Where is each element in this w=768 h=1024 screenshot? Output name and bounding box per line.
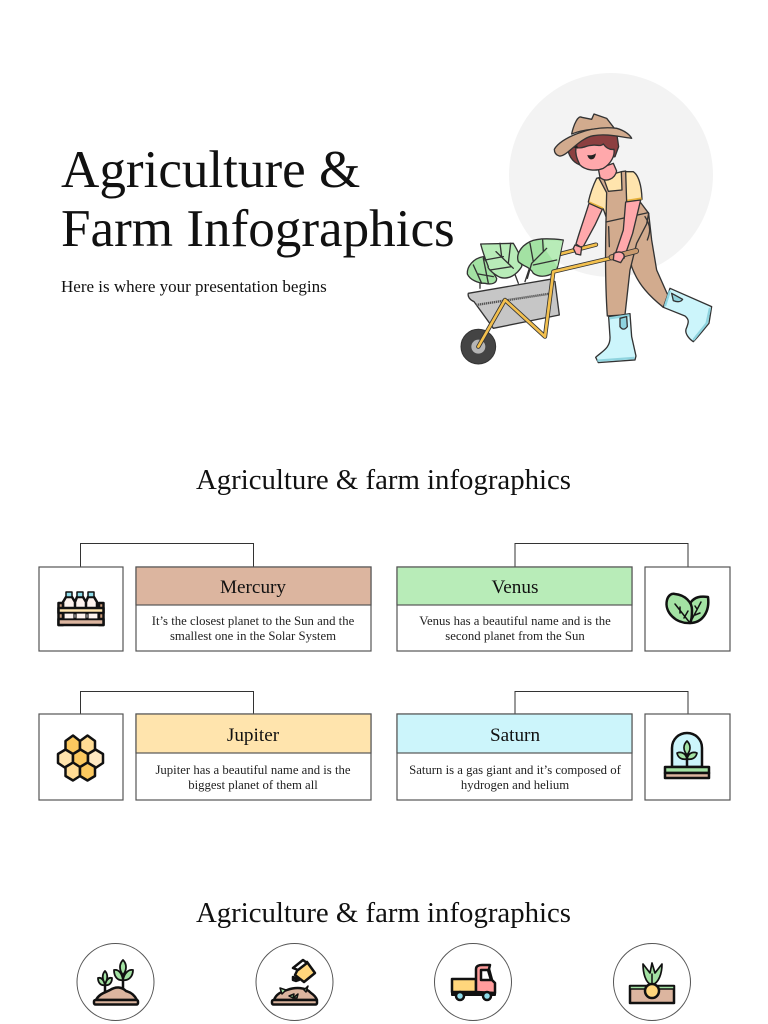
card: Jupiter: Jupiter <box>227 725 280 746</box>
illustration: farmer with wheelbarrow <box>461 73 713 364</box>
card: Saturn: hydrogen and helium <box>461 778 569 792</box>
card: Venus <box>397 544 730 651</box>
title: Agriculture & <box>61 141 360 199</box>
subtitle: Here is where your presentation begins <box>61 277 327 296</box>
icon: honeycomb <box>58 736 103 780</box>
card: Mercury: Mercury <box>220 577 286 598</box>
card: Mercury: It’s the closest planet to the Sun and the <box>152 614 355 628</box>
card: Venus: Venus <box>492 577 538 598</box>
card: Saturn: Saturn <box>490 725 540 746</box>
icon circle: root vegetable in soil <box>614 944 690 1020</box>
grey background circle <box>509 73 713 277</box>
card: Venus: Venus has a beautiful name and is the <box>419 614 611 628</box>
card: Mercury: smallest one in the Solar System <box>170 629 336 643</box>
icon: greenhouse dome <box>665 733 709 778</box>
card: Jupiter: Jupiter has a beautiful name and is the <box>155 763 351 777</box>
farmer figure <box>554 114 712 363</box>
title: Farm Infographics <box>61 200 455 258</box>
icon: milk crate <box>58 592 104 625</box>
section heading 1: Agriculture & farm infographics <box>196 464 571 496</box>
card: Venus: second planet from the Sun <box>445 629 585 643</box>
icon circle: seedlings on soil <box>77 944 154 1020</box>
icon: leaves <box>667 594 708 623</box>
section heading 2: Agriculture & farm infographics <box>196 897 571 929</box>
card: Saturn: Saturn is a gas giant and it’s composed of <box>409 763 622 777</box>
card: Jupiter: biggest planet of them all <box>188 778 318 792</box>
card: Jupiter <box>39 692 371 800</box>
wheelbarrow with leaves <box>461 239 636 364</box>
card: Mercury <box>39 544 371 651</box>
icon circle: pickup truck <box>434 944 512 1020</box>
icon circle: watering can over soil <box>256 944 333 1020</box>
title <box>61 141 455 258</box>
card: Saturn <box>397 692 730 800</box>
